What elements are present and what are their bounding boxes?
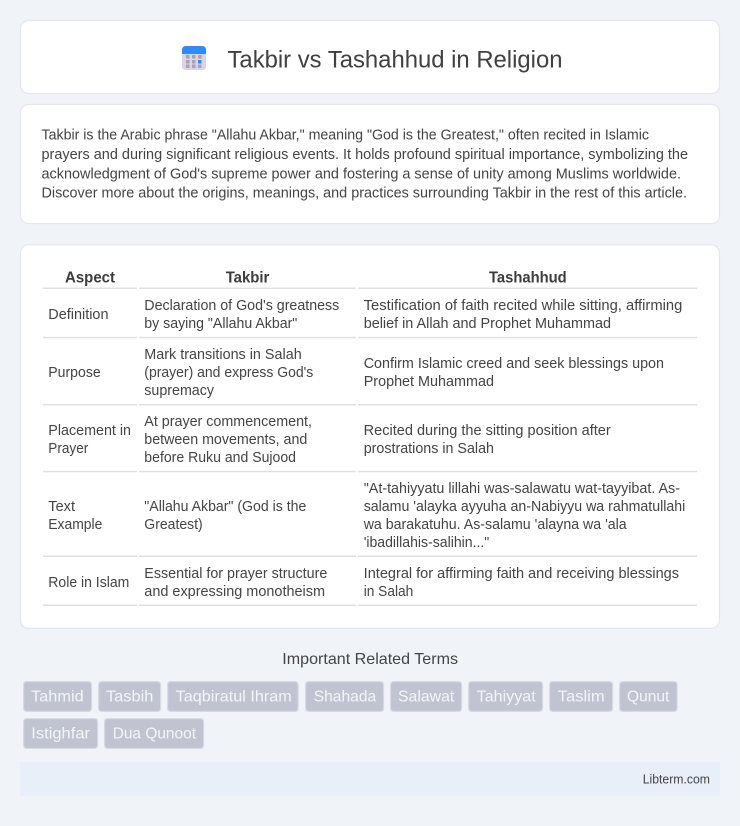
table row: Purpose: Mark transitions in Salah xyxy=(144,347,302,363)
table row: Placement in Prayer xyxy=(48,414,611,466)
table header row: Aspect xyxy=(65,270,116,287)
table row: Text Example: Text xyxy=(48,499,75,515)
text block: intro paragraph xyxy=(42,127,688,202)
table row: Role in Islam: Role in Islam xyxy=(48,575,129,591)
table row: Role in Islam: Integral for affirming faith and receiving blessings xyxy=(364,566,679,582)
table row: Placement in Prayer: before Ruku and Sujood xyxy=(144,450,296,466)
table row: Definition xyxy=(48,298,682,332)
table row: Definition: Testification of faith recited while sitting, affirming xyxy=(364,298,682,314)
icon: calendar xyxy=(182,46,206,70)
table header row: Tashahhud xyxy=(489,270,567,287)
related term tags: Tasbih xyxy=(106,689,153,706)
table header row xyxy=(65,270,567,287)
table row: Text Example: wa barakatuhu. As-salamu 'alayna wa 'ala xyxy=(363,517,627,533)
table row: Text Example: Example xyxy=(48,517,102,533)
table header row: Takbir xyxy=(226,270,269,287)
table row: Definition: Definition xyxy=(48,307,108,323)
table row: Text Example: Greatest) xyxy=(144,517,203,533)
related term tags xyxy=(24,682,677,748)
table row: Purpose: supremacy xyxy=(144,383,215,399)
related term tags: Salawat xyxy=(398,689,455,706)
table row: Text Example: "Allahu Akbar" (God is the xyxy=(144,499,306,515)
table row: Placement in Prayer: At prayer commencement, xyxy=(144,414,312,430)
related term tags: Qunut xyxy=(627,689,670,706)
table row: Placement in Prayer: between movements, and xyxy=(144,432,307,448)
table row: Text Example: salamu 'alayka ayyuha an-Nabiyyu wa rahmatullahi xyxy=(364,499,685,515)
table row: Role in Islam: and expressing monotheism xyxy=(144,584,325,600)
related term tags: Tahmid xyxy=(31,689,84,706)
table row: Purpose: Prophet Muhammad xyxy=(364,374,494,390)
table row: Role in Islam xyxy=(48,566,679,600)
related term tags: Istighfar xyxy=(31,726,91,743)
related term tags: Taslim xyxy=(558,689,605,706)
table row: Purpose xyxy=(48,347,664,399)
heading: important related terms: Important Related Terms xyxy=(282,651,458,668)
related term tags: Dua Qunoot xyxy=(113,726,197,743)
title: Takbir vs Tashahhud in Religion xyxy=(228,46,562,74)
table row: Purpose: (prayer) and express God's xyxy=(144,365,313,381)
table row: Placement in Prayer: Recited during the sitting position after xyxy=(364,423,611,439)
text block: intro paragraph: Takbir is the Arabic phrase "Allahu Akbar," meaning "God is the Greatest," often recited in Islamic xyxy=(42,127,649,143)
table row: Definition: by saying "Allahu Akbar" xyxy=(144,316,297,332)
table row: Role in Islam: Essential for prayer structure xyxy=(144,566,327,582)
text block: intro paragraph: acknowledgment of God's supreme power and fostering a sense of unity among Muslims worldwide. xyxy=(42,166,681,182)
table row: Definition: belief in Allah and Prophet Muhammad xyxy=(364,316,611,332)
table row: Placement in Prayer: Placement in xyxy=(48,423,131,439)
table row: Text Example: "At-tahiyyatu lillahi was-salawatu wat-tayyibat. As- xyxy=(364,481,680,497)
footer bar xyxy=(20,762,720,796)
text block: intro paragraph: prayers and during significant religious events. It holds profound spiritual importance, symbolizing the xyxy=(42,147,688,163)
table row: Text Example xyxy=(48,481,685,551)
table row: Placement in Prayer: Prayer xyxy=(48,441,88,457)
related term tags: Tahiyyat xyxy=(477,689,536,706)
panel: comparison table xyxy=(20,245,720,628)
table row: Text Example: 'ibadillahis-salihin..." xyxy=(364,535,489,551)
table row: Purpose: Purpose xyxy=(48,365,101,381)
panel: introduction xyxy=(20,104,720,224)
table row: Purpose: Confirm Islamic creed and seek blessings upon xyxy=(364,356,664,372)
related term tags: Shahada xyxy=(314,689,376,706)
footer source label: Libterm.com xyxy=(643,772,710,786)
table row: Role in Islam: in Salah xyxy=(364,584,413,600)
panel: title header xyxy=(20,20,720,94)
text block: intro paragraph: Discover more about the origins, meanings, and practices surrounding Takbir in the rest of this article. xyxy=(42,186,687,202)
table row: Definition: Declaration of God's greatness xyxy=(144,298,339,314)
related term tags: Taqbiratul Ihram xyxy=(176,689,292,706)
table row: Placement in Prayer: prostrations in Salah xyxy=(364,441,494,457)
